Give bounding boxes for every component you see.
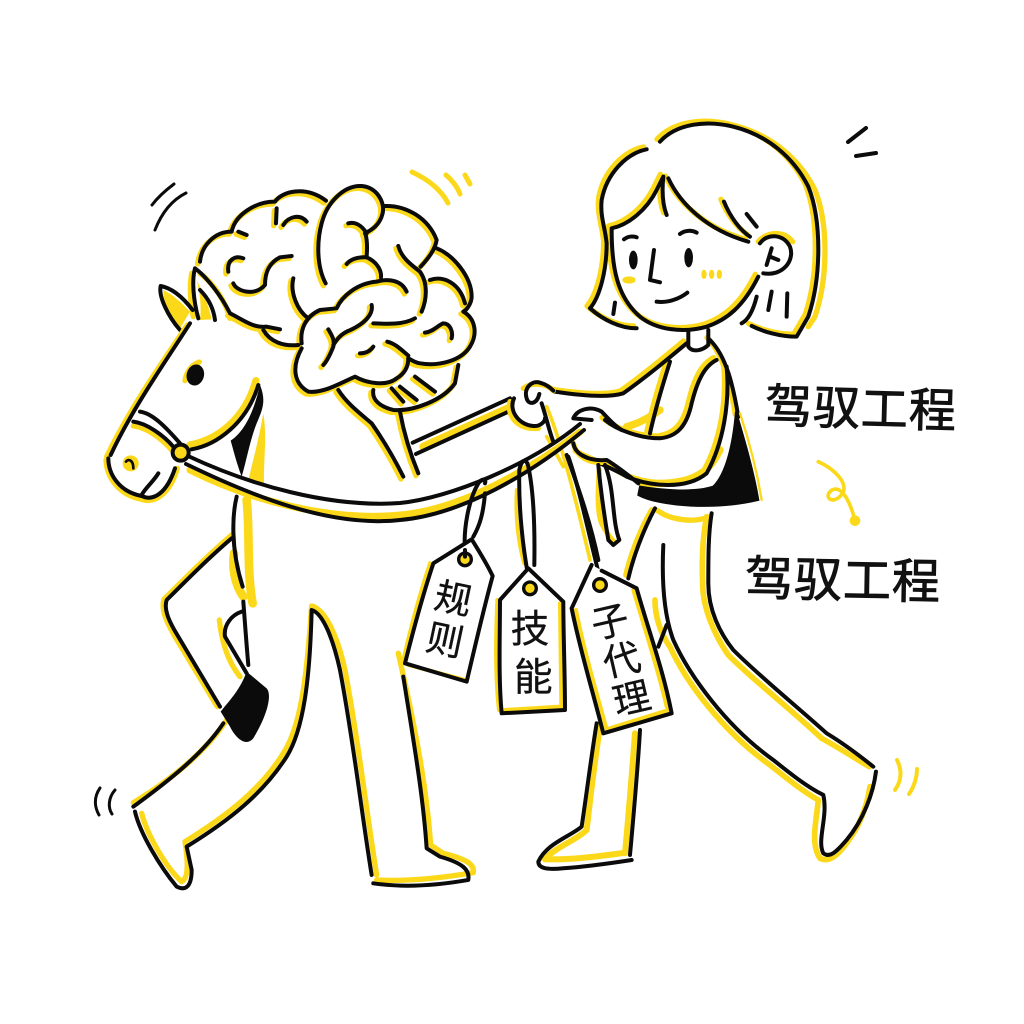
horse eye <box>184 362 206 388</box>
marks by hoof <box>95 788 115 815</box>
eyes <box>629 248 693 269</box>
motion marks <box>95 128 917 815</box>
long hanging rein <box>542 403 598 560</box>
hair, face outline <box>555 123 818 485</box>
horse face outline <box>106 323 258 500</box>
tag: 规则 <box>403 480 493 682</box>
near leg <box>626 508 876 860</box>
yellow marks right of brain <box>412 172 470 203</box>
horse ears <box>160 268 230 330</box>
far arm <box>413 398 511 454</box>
tag: 技能: 技 <box>511 609 549 652</box>
brain <box>198 186 475 479</box>
hair and shirt yellow shadow <box>552 121 815 483</box>
hands and reins detail <box>413 382 638 560</box>
hair detail <box>613 214 787 323</box>
neck <box>688 330 708 350</box>
yellow chest strokes <box>233 500 253 603</box>
yellow leg offset <box>133 535 473 882</box>
tag: 子代理: 理 <box>609 674 655 723</box>
marks left of brain <box>152 184 186 230</box>
near hand <box>573 409 638 483</box>
far leg <box>538 723 640 869</box>
heading: 驾驭工程 lower: 驾驭工程 <box>745 553 941 610</box>
horse head <box>106 268 265 500</box>
waist <box>657 510 710 520</box>
brows, nose and smile <box>624 231 697 302</box>
person upper body <box>552 121 825 506</box>
tag: 技能: 能 <box>514 657 553 700</box>
person lower body <box>538 508 876 869</box>
far hand <box>509 384 553 428</box>
tag: 规则: 规 <box>431 575 476 623</box>
black hoof <box>221 672 269 742</box>
black bag <box>638 412 758 506</box>
squiggle arrow <box>818 462 860 526</box>
loose rein end <box>598 465 619 545</box>
cheeks <box>622 270 722 284</box>
black leg outline <box>133 497 469 888</box>
heading: 驾驭工程 upper: 驾驭工程 <box>764 379 958 438</box>
long rein <box>186 424 584 521</box>
tag: 子代理: 子 <box>587 597 633 647</box>
tag: 子代理: 代 <box>599 636 645 685</box>
halter <box>133 412 189 461</box>
marks by person <box>848 128 876 156</box>
horse mane <box>231 385 265 487</box>
tag: 规则: 则 <box>422 617 467 665</box>
horse nostril <box>123 455 139 471</box>
horse body and legs <box>133 497 473 888</box>
tag: 技能 <box>496 461 565 713</box>
marks by boot <box>895 760 917 794</box>
ear <box>758 234 793 274</box>
tag: 子代理 <box>568 457 672 733</box>
brain yellow shadow <box>198 188 472 479</box>
brain outline and folds <box>200 186 475 477</box>
